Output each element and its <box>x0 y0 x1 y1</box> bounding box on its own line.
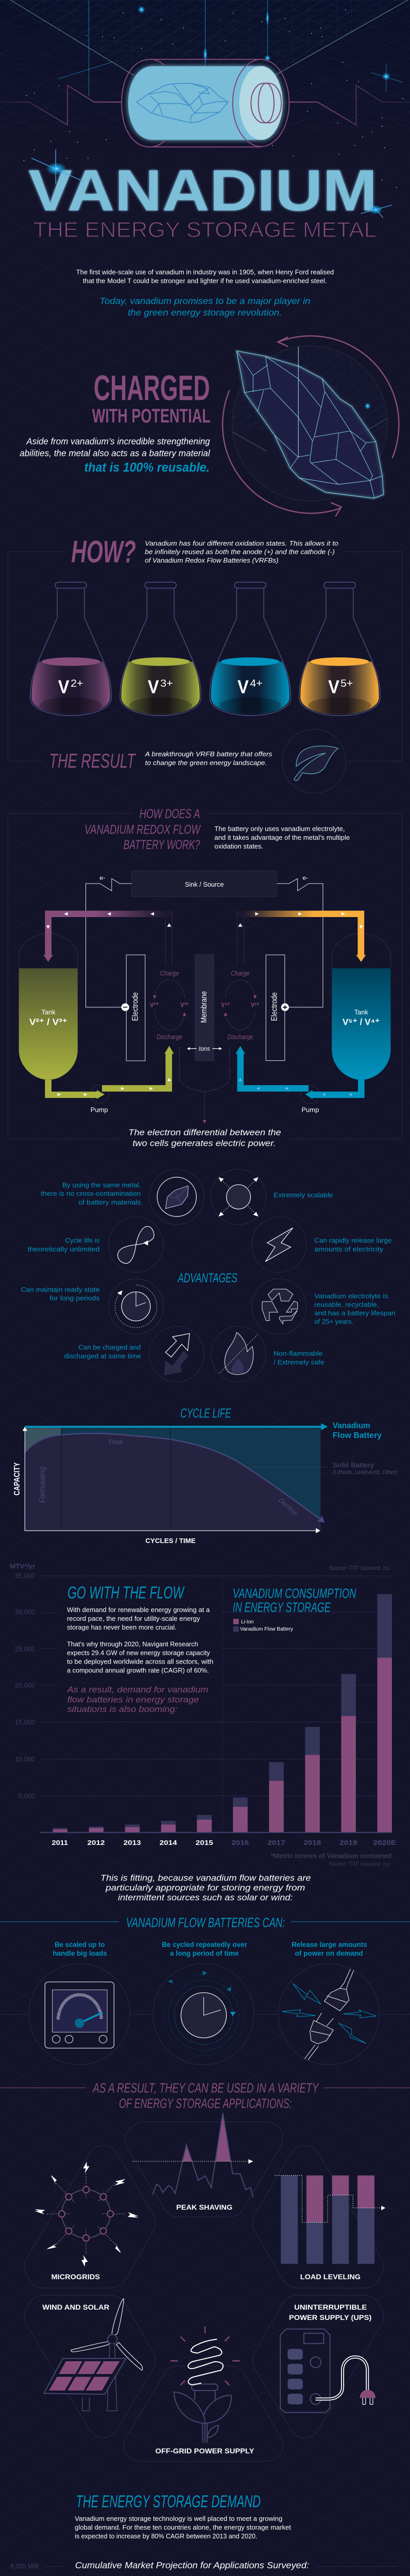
application: microgrids: MICROGRIDS <box>51 2273 100 2281</box>
heading: charged <box>92 369 211 427</box>
diagram: orange pipe <box>237 911 366 965</box>
diagram: right tank: V⁵⁺ / V⁴⁺ <box>343 1017 380 1027</box>
chart: cycle life: Peak <box>109 1438 123 1446</box>
diagram: membrane: Membrane <box>199 991 208 1023</box>
market chart grid <box>43 2567 398 2576</box>
bar chart x axis: 2020E <box>373 1839 396 1846</box>
bar chart y axis <box>10 1563 36 1800</box>
application: off-grid: OFF-GRID POWER SUPPLY <box>156 2447 254 2455</box>
diagram: charge discharge cycles <box>150 970 260 1041</box>
market chart y axis: 8,000 MW <box>10 2563 39 2570</box>
bar chart x axis: 2012 <box>88 1839 105 1846</box>
result text <box>145 751 272 767</box>
bar chart x axis: 2016 <box>231 1839 249 1846</box>
bar chart x axis <box>52 1839 396 1846</box>
diagram: charge discharge cycles: Charge <box>231 970 250 977</box>
flask V2+: V <box>58 676 70 698</box>
diagram: pumps <box>90 1085 319 1113</box>
intro text: The first wide-scale use of vanadium in industry was in 1905, when Henry Ford realised <box>76 268 334 276</box>
diagram: charge discharge cycles: Discharge <box>157 1033 182 1041</box>
icon: battery with crystal <box>122 59 289 147</box>
how text: be infinitely reused as both the anode (+) and the cathode (-) <box>145 549 335 556</box>
application: peak shaving <box>125 2113 283 2217</box>
crystal in circle <box>230 346 389 501</box>
flask V2+ <box>30 582 111 716</box>
bar chart legend: Vanadium Flow Battery <box>240 1626 293 1632</box>
how it works text: oxidation states. <box>214 842 263 850</box>
capability: cycled repeatedly: a long period of time <box>170 1950 239 1958</box>
heading: how does a vrfb work: HOW DOES A <box>140 807 200 821</box>
flask V4+: 4+ <box>250 677 263 689</box>
diagram: dotted flow to caption <box>179 1047 230 1123</box>
go with the flow text: a compound annual growth rate (CAGR) of 60%. <box>67 1667 209 1674</box>
diagram: electrodes: Electrode <box>130 992 140 1021</box>
application: wind and solar: WIND AND SOLAR <box>42 2303 110 2311</box>
advantage: reusable: reusable, recyclable, <box>314 1301 379 1308</box>
bar chart y axis: 25,000 <box>15 1646 35 1653</box>
chart: cycle life <box>12 1423 328 1545</box>
advantage: no cross contamination <box>41 1169 204 1225</box>
diagram: purple pipe <box>43 911 172 965</box>
flask V3+: 3+ <box>160 677 173 689</box>
diagram: electron labels <box>99 875 309 881</box>
diagram: membrane <box>195 955 214 1061</box>
bar chart legend: Li-Ion <box>241 1619 253 1625</box>
section: hero <box>0 0 410 318</box>
how it works text: and it takes advantage of the metal’s multiple <box>214 834 350 841</box>
advantage: non-flammable <box>211 1326 324 1382</box>
heading: how does a vrfb work: BATTERY WORK? <box>124 838 200 852</box>
flask V5+: V <box>328 676 339 698</box>
flask V5+: 5+ <box>340 677 353 689</box>
advantage: charge discharge <box>64 1326 204 1382</box>
how text <box>145 540 338 564</box>
advantage: reusable: Vanadium electrolyte is <box>314 1292 388 1300</box>
advantage: cycle life <box>28 1217 163 1273</box>
heading: the result: THE RESULT <box>49 750 136 772</box>
bar chart y axis: 5,000 <box>19 1792 35 1800</box>
diagram: charge discharge cycles: V⁴⁺ <box>221 1002 230 1009</box>
chart title: Cumulative Market Projection for Applications Surveyed: <box>75 2561 309 2570</box>
application: load leveling <box>252 2145 385 2288</box>
advantage: rapid release: Can rapidly release large <box>314 1236 392 1244</box>
go with the flow text: to be deployed worldwide across all sectors, with <box>67 1658 213 1665</box>
go with the flow text: That's why through 2020, Navigant Research <box>67 1640 198 1648</box>
flask V4+: V <box>237 676 249 698</box>
advantage: reusable: of 25+ years. <box>314 1318 353 1325</box>
advantage: charge discharge: Can be charged and <box>78 1344 141 1351</box>
diagram: electron labels: e- <box>302 875 309 881</box>
application: off-grid <box>124 2327 283 2462</box>
diagram: electrodes: Electrode <box>269 992 279 1021</box>
diagram: pumps: Pump <box>91 1106 108 1113</box>
diagram: right tank <box>332 934 390 1080</box>
go with the flow text: record pace, the need for utility-scale energy <box>67 1615 200 1622</box>
capability: scale up <box>29 1941 130 2065</box>
section: result and flow battery diagram <box>8 729 402 1139</box>
capability: scale up: handle big loads <box>53 1950 107 1958</box>
section: applications <box>0 2081 410 2462</box>
result text: to change the green energy landscape. <box>145 759 267 767</box>
cycle arrow bottom <box>223 390 341 516</box>
how it works text <box>214 825 350 850</box>
diagram: ions <box>187 1045 222 1052</box>
heading: how does a vrfb work: VANADIUM REDOX FLOW <box>84 822 201 837</box>
advantage: charge discharge: discharged at same time <box>64 1352 141 1360</box>
how text: Vanadium has four different oxidation states. This allows it to <box>145 540 338 548</box>
capability: release power <box>279 1941 380 2065</box>
bridge text: particularly appropriate for storing energy from <box>105 1883 305 1893</box>
diagram: charge discharge cycles: V⁵⁺ <box>251 1002 260 1009</box>
diagram: sink source box <box>132 871 277 896</box>
application: peak shaving: PEAK SHAVING <box>176 2204 232 2211</box>
application: ups: POWER SUPPLY (UPS) <box>289 2314 371 2322</box>
intro callout <box>99 296 311 318</box>
bar chart y axis: 30,000 <box>15 1608 35 1616</box>
panel: how frame <box>8 552 402 761</box>
advantage: ready state <box>21 1279 163 1334</box>
heading: cycle life: CYCLE LIFE <box>180 1406 231 1420</box>
diagram caption: The electron differential between the <box>128 1127 281 1137</box>
demand text: global demand. For these ten countries alone, the energy storage market <box>75 2524 291 2531</box>
heading: advantages: ADVANTAGES <box>177 1271 237 1285</box>
cycle arrow top <box>278 336 399 459</box>
advantage: rapid release <box>251 1217 392 1273</box>
demand text <box>75 2515 291 2540</box>
diagram: left tank <box>19 934 78 1080</box>
bridge text: This is fitting, because vanadium flow batteries are <box>100 1873 311 1883</box>
go with the flow text: expects 29.4 GW of new energy storage capacity <box>67 1649 210 1656</box>
capability: release power: Release large amounts <box>292 1941 367 1949</box>
capability: release power: of power on demand <box>295 1950 363 1958</box>
charged text <box>20 436 210 474</box>
intro callout: Today, vanadium promises to be a major player in <box>99 296 311 306</box>
diagram: circuit wires <box>86 878 323 1007</box>
advantage: non-flammable: / Extremely safe <box>274 1359 324 1366</box>
purple callout <box>67 1685 209 1714</box>
source note: Source: TTP Squared, Inc. <box>329 1565 391 1571</box>
how text: of Vanadium Redox Flow Batteries (VRFBs) <box>145 557 279 564</box>
demand text: is expected to increase by 80% CAGR between 2013 and 2020. <box>75 2533 258 2540</box>
section: cycle life chart and consumption heading <box>10 1406 398 1833</box>
bar chart x axis: 2018 <box>303 1839 321 1846</box>
bar chart y axis: 35,000 <box>15 1572 35 1580</box>
advantage: no cross contamination: there is no cross-contamination <box>41 1190 141 1197</box>
bar chart grid and axes <box>40 1575 391 1833</box>
diagram: ions: Ions <box>199 1045 210 1052</box>
heading: vanadium consumption: IN ENERGY STORAGE <box>233 1600 331 1615</box>
bar chart x axis: 2019 <box>339 1839 357 1846</box>
application: microgrids <box>25 2145 156 2288</box>
diagram: right tank: Tank <box>354 1008 368 1016</box>
heading: how: HOW? <box>71 535 136 569</box>
flask V5+ <box>299 582 380 716</box>
application: ups: UNINTERRUPTIBLE <box>294 2303 367 2311</box>
purple callout: situations is also booming: <box>67 1705 178 1714</box>
diagram caption: two cells generates electric power. <box>132 1138 276 1148</box>
intro callout: the green energy storage revolution. <box>128 308 282 318</box>
diagram: electrodes <box>126 955 285 1061</box>
chart legend: vanadium flow battery: Vanadium <box>333 1421 370 1430</box>
diagram: charge discharge cycles: Charge <box>160 970 179 977</box>
heading: charged: CHARGED <box>94 369 210 408</box>
advantage: ready state: for long periods <box>49 1295 99 1302</box>
chart: cycle life: Formulating <box>38 1467 47 1503</box>
advantage: scalable: Extremely scalable <box>274 1191 333 1199</box>
panel: how it works frame <box>8 814 402 1139</box>
result text: A breakthrough VRFB battery that offers <box>145 751 272 758</box>
application: wind and solar <box>25 2295 156 2438</box>
section: energy storage demand <box>10 2492 398 2576</box>
purple callout: flow batteries in energy storage <box>67 1695 199 1705</box>
capability row dividers <box>0 2014 410 2015</box>
demand text: Vanadium energy storage technology is well placed to meet a growing <box>75 2515 282 2522</box>
advantage: scalable <box>211 1169 333 1225</box>
diagram: sink source box: Sink / Source <box>185 881 224 888</box>
bar chart y axis: 15,000 <box>15 1718 35 1726</box>
zigzag wire right <box>289 86 410 125</box>
diagram: charge discharge cycles: Discharge <box>228 1033 253 1041</box>
heading: how does a vrfb work <box>84 807 201 852</box>
bar chart y axis: 20,000 <box>15 1682 35 1689</box>
advantage: reusable: and has a battery lifespan <box>314 1310 396 1317</box>
diagram: terminals <box>122 1004 289 1011</box>
section: consumption chart labels and capabilities <box>0 1685 410 2065</box>
bar chart legend <box>233 1619 293 1632</box>
bar chart y axis: MTV*/yr <box>10 1563 36 1570</box>
heading: charged: WITH POTENTIAL <box>92 405 211 427</box>
how it works text: The battery only uses vanadium electrolyte, <box>214 825 345 833</box>
chart legend: vanadium flow battery: Flow Battery <box>333 1431 382 1440</box>
purple callout: As a result, demand for vanadium <box>67 1685 209 1694</box>
intro text: that the Model T could be stronger and lighter if he used vanadium-enriched steel. <box>83 277 327 284</box>
chart legend: solid battery <box>333 1461 398 1476</box>
zigzag wire left <box>0 86 122 125</box>
diagram: olive pipe <box>45 1046 174 1099</box>
chart footnote <box>271 1852 391 1867</box>
bar chart x axis: 2017 <box>267 1839 285 1846</box>
application: load leveling: LOAD LEVELING <box>300 2273 361 2281</box>
chart legend: vanadium flow battery <box>333 1421 382 1440</box>
diagram: charge discharge cycles: V³⁺ <box>180 1002 189 1009</box>
flask V4+ <box>210 582 291 716</box>
advantage: cycle life: theoretically unlimited <box>28 1245 99 1252</box>
application: ups <box>252 2295 383 2438</box>
bridge text <box>100 1873 311 1903</box>
diagram: left tank: Tank <box>41 1008 56 1016</box>
chart: cycle life: Decline <box>277 1497 300 1517</box>
chart: cycle life: CAPACITY <box>12 1462 21 1496</box>
bar chart x axis: 2013 <box>124 1839 141 1846</box>
diagram: blue pipe <box>235 1046 365 1099</box>
flask V2+: 2+ <box>71 677 83 689</box>
heading: energy storage demand: THE ENERGY STORAGE DEMAND <box>76 2492 261 2511</box>
diagram: left tank: V²⁺ / V³⁺ <box>29 1017 67 1027</box>
capability: cycled repeatedly <box>153 1941 254 2065</box>
bar chart x axis: 2014 <box>160 1839 177 1846</box>
diagram: electron labels: e- <box>99 875 106 881</box>
capability: scale up: Be scaled up to <box>55 1941 105 1949</box>
charged text: abilities, the metal also acts as a battery material <box>20 448 210 459</box>
section: flow diagram lower and advantages <box>21 1046 396 1382</box>
charged text: Aside from vanadium’s incredible strengthening <box>26 436 210 447</box>
diagram caption <box>128 1127 281 1148</box>
chart legend: solid battery: Solid Battery <box>333 1461 374 1469</box>
heading: vanadium consumption <box>233 1586 356 1615</box>
section: charged with potential <box>8 336 402 761</box>
charged text: that is 100% reusable. <box>84 460 210 474</box>
heading: go with the flow: GO WITH THE FLOW <box>67 1583 185 1602</box>
icon: leaf <box>282 729 346 793</box>
capability: cycled repeatedly: Be cycled repeatedly over <box>162 1941 247 1949</box>
advantage: ready state: Can maintain ready state <box>21 1286 100 1293</box>
chart footnote: Source: TTP Squared, Inc. <box>329 1861 391 1867</box>
bridge text: intermittent sources such as solar or wind: <box>118 1893 293 1903</box>
advantage: no cross contamination: By using the same metal, <box>62 1181 141 1189</box>
go with the flow text <box>67 1606 213 1674</box>
flask V3+ <box>120 582 201 716</box>
chart: cycle life: CYCLES / TIME <box>145 1537 196 1545</box>
advantage: no cross contamination: of battery materials <box>78 1198 141 1206</box>
go with the flow text: With demand for renewable energy growing at a <box>67 1606 210 1614</box>
bar chart bars <box>53 1594 392 1832</box>
advantage: reusable <box>251 1279 396 1334</box>
title: VANADIUM <box>28 157 378 223</box>
advantage: rapid release: amounts of electricity <box>314 1245 383 1252</box>
advantage: cycle life: Cycle life is <box>65 1236 99 1244</box>
diagram: charge discharge cycles: V²⁺ <box>150 1002 159 1009</box>
diagram: pumps: Pump <box>301 1106 319 1113</box>
bar chart y axis: 10,000 <box>15 1756 35 1763</box>
heading: applications <box>0 2081 410 2111</box>
bar chart x axis: 2011 <box>52 1839 68 1846</box>
bar chart x axis: 2015 <box>196 1839 213 1846</box>
heading: flow batteries can: VANADIUM FLOW BATTERIES CAN: <box>126 1916 285 1930</box>
title sparkles <box>31 149 392 218</box>
go with the flow text: storage has never been more crucial. <box>67 1623 177 1631</box>
flask V3+: V <box>148 676 159 698</box>
intro text <box>76 268 334 284</box>
chart footnote: *Metric tonnes of Vanadium contained <box>271 1852 391 1859</box>
advantage: non-flammable: Non-flammable <box>274 1350 323 1357</box>
